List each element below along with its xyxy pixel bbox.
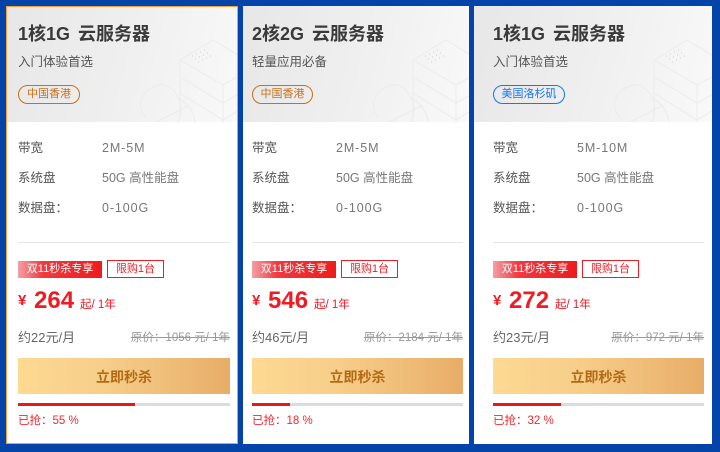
buy button bbox=[18, 358, 230, 394]
purchase limit badge: 限购1台 bbox=[350, 263, 389, 275]
spec list: 0-100G bbox=[336, 201, 383, 215]
region tag: 美国洛杉矶 bbox=[502, 88, 556, 100]
spec list: 系统盘 bbox=[252, 171, 290, 185]
progress bar bbox=[18, 403, 230, 406]
spec list: 带宽 bbox=[493, 141, 518, 155]
promo badge: 双11秒杀专享 bbox=[261, 263, 327, 275]
region tag bbox=[252, 85, 313, 104]
icon: server and cloud watermark bbox=[392, 40, 469, 122]
spec list bbox=[252, 141, 413, 215]
progress bar bbox=[493, 403, 704, 406]
price: 264 bbox=[34, 287, 74, 314]
spec list: 系统盘 bbox=[493, 171, 531, 185]
sold percentage: 已抢：55 % bbox=[18, 415, 79, 427]
card: 1核1G Los Angeles plan bbox=[474, 6, 712, 444]
original price: 原价：2184 元/ 1年 bbox=[364, 332, 463, 344]
spec list: 0-100G bbox=[577, 201, 624, 215]
spec list: 数据盘： bbox=[493, 201, 543, 215]
price unit: 起/ 1年 bbox=[314, 299, 350, 311]
buy button: 立即秒杀 bbox=[96, 369, 152, 385]
card header bbox=[7, 7, 237, 122]
promo badge bbox=[493, 261, 577, 278]
promo badge bbox=[252, 261, 336, 278]
buy button: 立即秒杀 bbox=[570, 369, 626, 385]
purchase limit badge: 限购1台 bbox=[591, 263, 630, 275]
icon: server and cloud watermark bbox=[634, 40, 712, 122]
spec list: 5M-10M bbox=[577, 141, 628, 155]
plan title: 1核1G 云服务器 bbox=[493, 24, 625, 44]
monthly price: 约22元/月 bbox=[18, 330, 75, 345]
spec list: 系统盘 bbox=[18, 171, 56, 185]
spec list: 数据盘： bbox=[252, 201, 302, 215]
spec list: 50G 高性能盘 bbox=[577, 171, 654, 185]
plan title: 1核1G 云服务器 bbox=[18, 24, 150, 44]
plan subtitle: 入门体验首选 bbox=[493, 55, 568, 69]
buy button bbox=[252, 358, 463, 394]
currency symbol: ¥ bbox=[18, 292, 26, 309]
spec list: 数据盘： bbox=[18, 201, 68, 215]
sold percentage: 已抢：32 % bbox=[493, 415, 554, 427]
spec list: 2M-5M bbox=[336, 141, 379, 155]
spec list: 2M-5M bbox=[102, 141, 145, 155]
buy button bbox=[493, 358, 704, 394]
spec list bbox=[493, 141, 654, 215]
price: 546 bbox=[268, 287, 308, 314]
spec list: 50G 高性能盘 bbox=[102, 171, 179, 185]
currency symbol: ¥ bbox=[493, 292, 501, 309]
monthly price: 约46元/月 bbox=[252, 330, 309, 345]
price: 272 bbox=[509, 287, 549, 314]
monthly price: 约23元/月 bbox=[493, 330, 550, 345]
purchase limit badge bbox=[107, 260, 164, 278]
promo badge bbox=[18, 261, 102, 278]
spec list: 带宽 bbox=[18, 141, 43, 155]
card header bbox=[474, 6, 712, 122]
purchase limit badge: 限购1台 bbox=[116, 263, 155, 275]
spec list: 带宽 bbox=[252, 141, 277, 155]
spec list: 0-100G bbox=[102, 201, 149, 215]
price unit: 起/ 1年 bbox=[80, 299, 116, 311]
region tag: 中国香港 bbox=[260, 88, 304, 100]
plan subtitle: 入门体验首选 bbox=[18, 55, 93, 69]
region tag: 中国香港 bbox=[27, 88, 71, 100]
buy button: 立即秒杀 bbox=[330, 369, 386, 385]
currency symbol: ¥ bbox=[252, 292, 260, 309]
card: 2核2G Hong Kong plan bbox=[243, 6, 469, 444]
promo badge: 双11秒杀专享 bbox=[502, 263, 568, 275]
promo badge: 双11秒杀专享 bbox=[27, 263, 93, 275]
plan subtitle: 轻量应用必备 bbox=[252, 55, 327, 69]
purchase limit badge bbox=[341, 260, 398, 278]
card: 1核1G Hong Kong plan bbox=[6, 6, 238, 444]
progress bar bbox=[252, 403, 463, 406]
plan title: 2核2G 云服务器 bbox=[252, 24, 384, 44]
sold percentage: 已抢：18 % bbox=[252, 415, 313, 427]
original price: 原价：972 元/ 1年 bbox=[611, 332, 704, 344]
purchase limit badge bbox=[582, 260, 639, 278]
original price: 原价：1056 元/ 1年 bbox=[131, 332, 230, 344]
spec list bbox=[18, 141, 179, 215]
region tag bbox=[493, 85, 565, 104]
region tag bbox=[18, 85, 80, 104]
card header bbox=[243, 6, 469, 122]
price unit: 起/ 1年 bbox=[555, 299, 591, 311]
icon: server and cloud watermark bbox=[156, 40, 237, 123]
spec list: 50G 高性能盘 bbox=[336, 171, 413, 185]
